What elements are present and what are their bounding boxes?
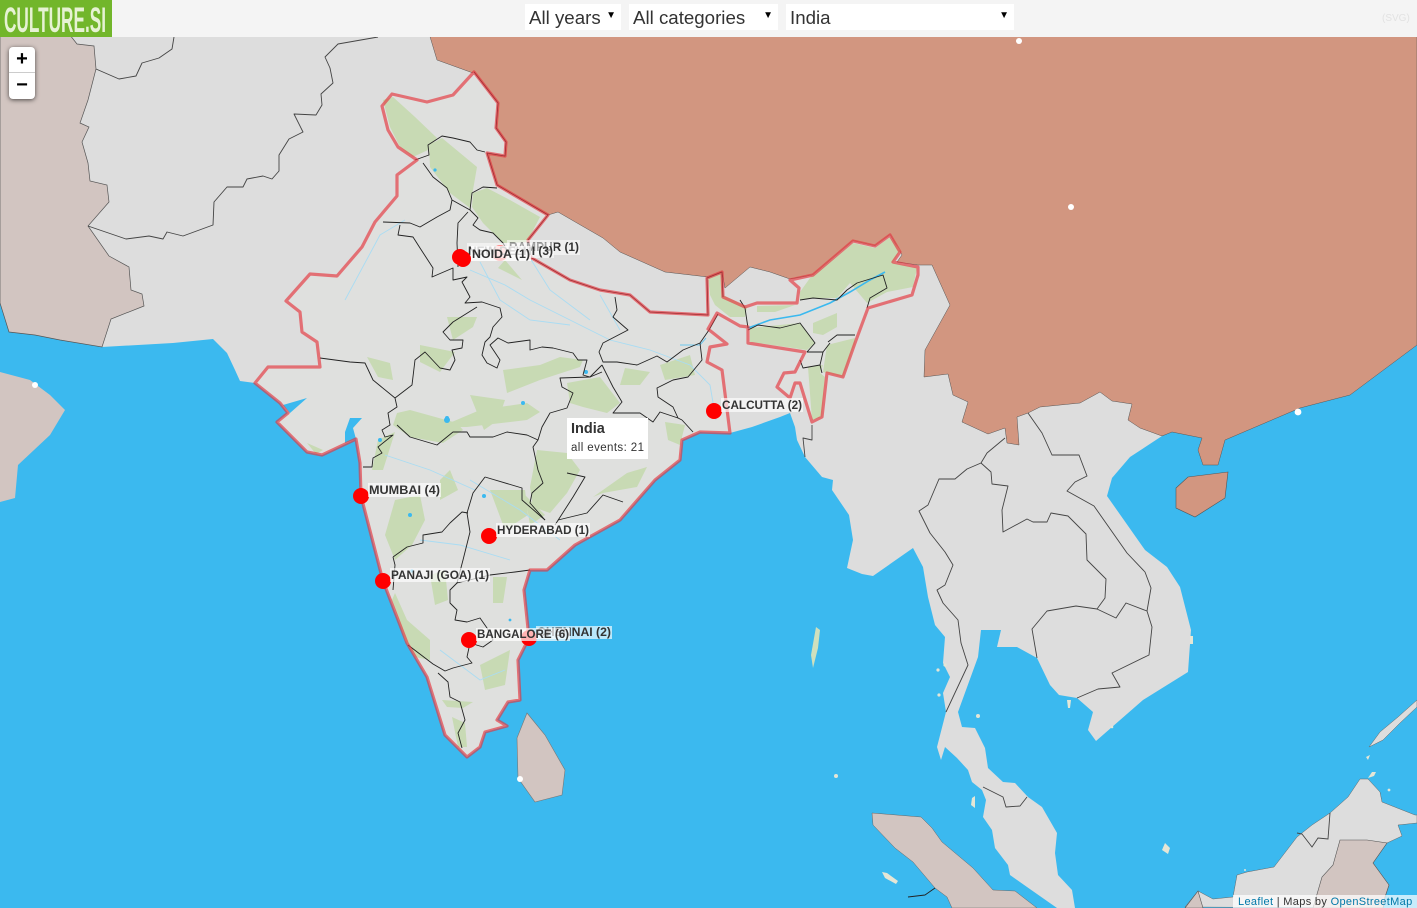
svg link: (SVG) xyxy=(1382,13,1410,24)
label: Bangalore: BANGALORE (6) xyxy=(477,627,569,641)
island: Hainan xyxy=(1176,472,1228,517)
label: Rampur: RAMPUR (1) xyxy=(509,240,579,254)
rivers xyxy=(345,220,716,680)
select: years: All years xyxy=(529,7,601,28)
select: years: ▼ xyxy=(606,10,616,21)
attribution: Leaflet | Maps by OpenStreetMap xyxy=(1238,896,1413,908)
select: country: ▼ xyxy=(999,10,1009,21)
marker: Noida xyxy=(455,246,531,267)
marker: New Delhi xyxy=(452,243,554,265)
Borneo Kalimantan part xyxy=(1313,840,1389,908)
top bar xyxy=(0,0,1417,37)
popup: India: all events: 21 xyxy=(571,442,644,454)
India outline xyxy=(255,72,918,757)
label: Chennai: CHENNAI (2) xyxy=(537,625,611,639)
marker: Mumbai xyxy=(353,483,441,504)
island: Borneo xyxy=(1185,779,1417,908)
white dots xyxy=(32,38,1301,782)
marker: Calcutta xyxy=(706,398,803,419)
island: Sumatra xyxy=(872,813,1037,908)
island: Andaman xyxy=(811,627,820,668)
label: Panaji: PANAJI (GOA) (1) xyxy=(391,568,489,582)
marker: Panaji xyxy=(375,568,490,589)
select: country: India xyxy=(790,7,831,28)
state borders xyxy=(320,72,887,748)
Brahmaputra xyxy=(748,272,885,328)
label: Hyderabad: HYDERABAD (1) xyxy=(497,523,589,537)
small lakes xyxy=(378,168,588,621)
label: Noida: NOIDA (1) xyxy=(472,247,530,261)
country: Iran xyxy=(0,30,144,347)
select: categories: All categories xyxy=(633,7,745,28)
marker: Hyderabad xyxy=(481,523,590,544)
country borders xyxy=(88,37,1152,897)
island: Palawan xyxy=(1369,700,1417,747)
country: Sri Lanka xyxy=(517,713,565,802)
Borneo west tip xyxy=(1185,891,1203,908)
popup: India: India xyxy=(571,421,605,437)
select: categories: ▼ xyxy=(763,10,773,21)
label: New Delhi: NEW DELHI (3) xyxy=(468,244,553,258)
marker: Bangalore xyxy=(461,627,570,648)
country: Oman xyxy=(0,372,65,502)
zoom control: + xyxy=(16,48,28,70)
select: country xyxy=(786,4,1014,30)
green forest patches xyxy=(307,97,917,747)
select: categories xyxy=(629,4,778,30)
India land xyxy=(255,72,918,757)
Gulf of Kutch xyxy=(283,398,307,413)
label: Mumbai: MUMBAI (4) xyxy=(369,483,440,497)
land frontier shadow xyxy=(474,72,723,315)
popup: India xyxy=(567,418,648,459)
Gulf of Khambhat xyxy=(345,418,362,443)
select: years xyxy=(525,4,621,30)
Brunei Sarawak border xyxy=(1297,813,1330,847)
label: Calcutta: CALCUTTA (2) xyxy=(722,398,802,412)
marker: Rampur xyxy=(492,240,580,261)
marker: Chennai xyxy=(521,625,612,646)
small islands xyxy=(834,636,1390,884)
zoom control: − xyxy=(16,74,28,96)
zoom control xyxy=(9,47,35,99)
country: China xyxy=(428,30,1417,465)
